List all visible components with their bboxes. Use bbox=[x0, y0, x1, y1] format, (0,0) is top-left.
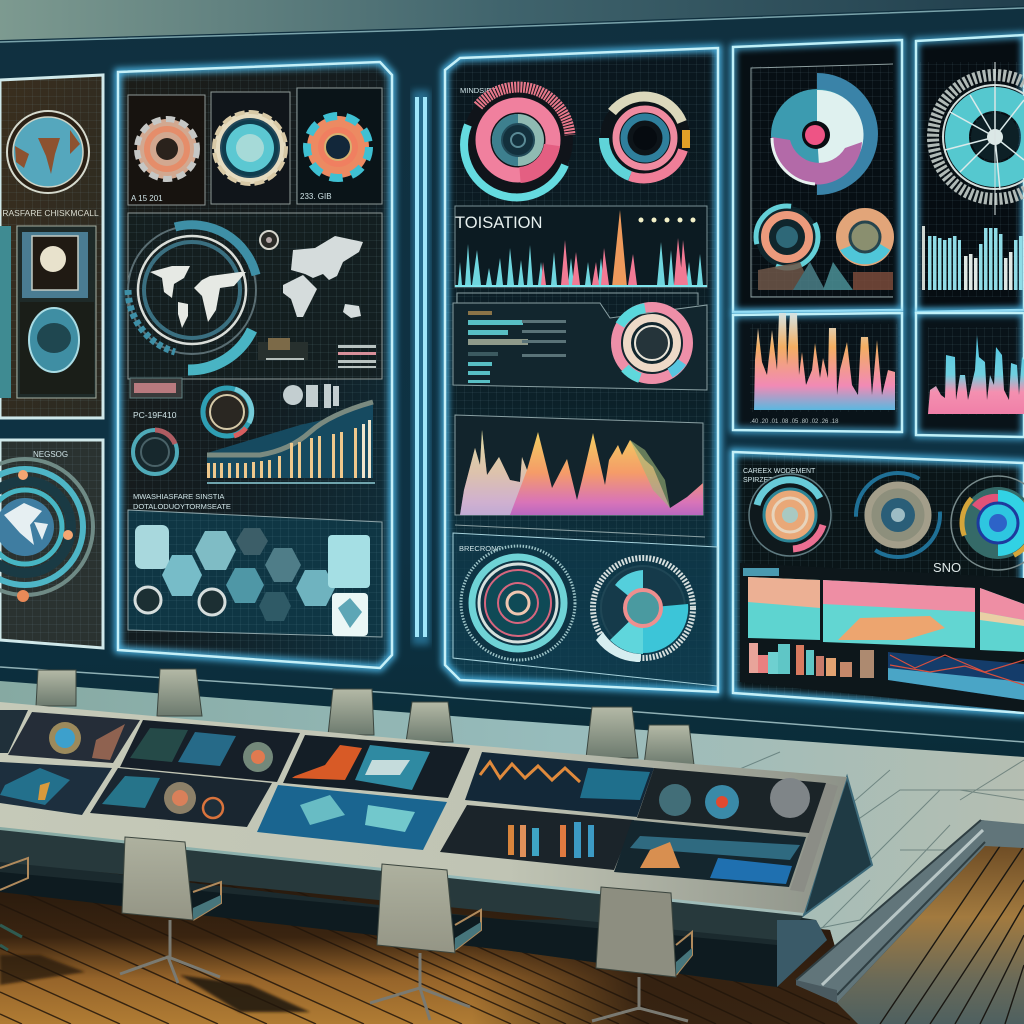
panel: far right middle chart bbox=[916, 313, 1024, 437]
bar list with donut bbox=[453, 293, 707, 390]
console top surface bbox=[0, 702, 847, 913]
area chart bbox=[455, 415, 705, 537]
panel: right top bbox=[733, 40, 902, 312]
hexagon module bbox=[128, 510, 382, 637]
panel: right middle chart bbox=[733, 313, 902, 432]
panel: main left bbox=[118, 62, 392, 668]
panel: far left top bbox=[0, 75, 103, 418]
panel: far left bottom bbox=[0, 440, 103, 648]
globe bbox=[7, 111, 89, 193]
tile captions: A 15 201 bbox=[131, 194, 163, 203]
pie ring bbox=[771, 73, 878, 195]
tile captions bbox=[131, 192, 332, 203]
radial globe bbox=[0, 459, 93, 602]
small heading: MINDSIET, WARHIUM bbox=[460, 86, 536, 95]
screen group left bbox=[0, 710, 140, 815]
labels: SNO bbox=[933, 560, 961, 575]
labels: CAREEX WODEMENT bbox=[743, 468, 816, 475]
mini bells bbox=[758, 262, 893, 290]
tile captions: 233. GIB bbox=[300, 192, 332, 201]
chair 1 bbox=[120, 837, 221, 983]
floor bbox=[0, 681, 1024, 985]
radial chart bbox=[933, 62, 1024, 215]
labels: SPIRZET bbox=[743, 477, 773, 484]
right end cap bbox=[804, 777, 872, 915]
large ring chart bbox=[463, 85, 573, 197]
chair 2 bbox=[370, 864, 481, 1020]
back row chairs bbox=[36, 669, 694, 765]
ceiling band bbox=[0, 0, 1024, 42]
three ring charts bbox=[749, 473, 1024, 570]
chart title: TOISATION bbox=[455, 214, 542, 232]
panel: right middle chart: .40 .20 .01 .08 .05 .80 .02 .26 .18 bbox=[750, 419, 839, 425]
stacked bands bbox=[740, 563, 1024, 712]
small ring chart bbox=[600, 93, 690, 183]
label: NEGSOG bbox=[33, 450, 68, 459]
console screens bbox=[0, 710, 826, 887]
screen group mid bbox=[90, 720, 300, 827]
world map module bbox=[128, 213, 382, 379]
lower ring pair bbox=[453, 533, 717, 686]
neon divider bars bbox=[412, 90, 430, 645]
top gear tiles bbox=[128, 88, 382, 205]
caption lines bbox=[133, 492, 231, 511]
caption: IRASFARE CHISKMCALL bbox=[0, 208, 99, 218]
baseboard line bbox=[0, 667, 1024, 742]
panel: right lower bbox=[733, 452, 1024, 713]
panel: center bbox=[445, 48, 718, 692]
chair 3 bbox=[592, 887, 692, 1021]
mid trend module bbox=[130, 378, 375, 484]
wall background bbox=[0, 0, 1024, 770]
lower ring pair: BRECRONG bbox=[459, 544, 503, 553]
raised ledge bbox=[796, 820, 1024, 1003]
wooden floor left bbox=[0, 850, 858, 1024]
sub-panel grid bbox=[0, 226, 96, 398]
screen group right bbox=[440, 752, 826, 887]
caption lines: MWASHIASFARE SINSTIA bbox=[133, 492, 224, 501]
caption lines: DOTALODUOYTORMSEATE bbox=[133, 502, 231, 511]
chair 4 at edge bbox=[0, 858, 28, 950]
console base bbox=[0, 860, 827, 987]
panel: far right top bbox=[916, 35, 1024, 312]
front chairs bbox=[0, 837, 692, 1021]
mid trend module: PC-19F410 bbox=[133, 410, 177, 420]
wooden floor right bbox=[830, 846, 1024, 1024]
labels bbox=[743, 468, 961, 575]
bar spectrum bbox=[922, 226, 1022, 290]
console bbox=[0, 702, 872, 987]
spectrum chart with title bbox=[455, 206, 707, 287]
two small rings bbox=[756, 206, 894, 268]
screen group center bbox=[257, 735, 470, 850]
